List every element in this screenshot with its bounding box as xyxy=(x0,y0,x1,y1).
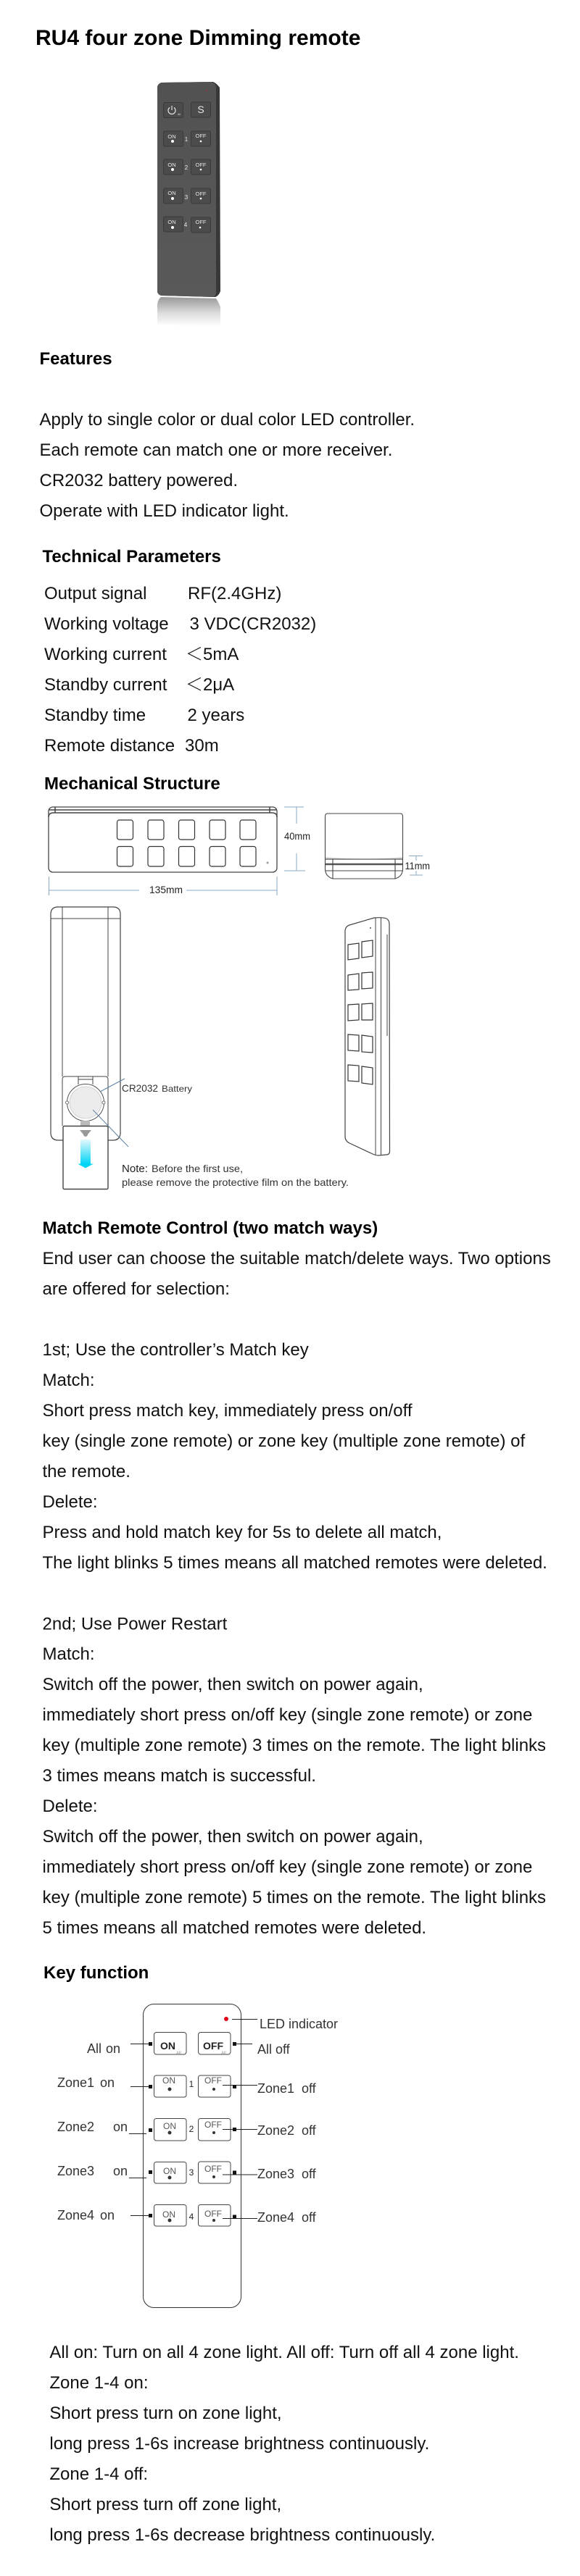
features list: CR2032 battery powered. xyxy=(39,471,238,490)
match method two: Switch off the power, then switch on power again, xyxy=(42,1827,423,1847)
zone 1 keys: ON xyxy=(167,133,176,140)
heading: features: Features xyxy=(39,349,112,369)
zone 4: Zone4 xyxy=(257,2210,294,2225)
remote face xyxy=(157,82,216,297)
technical parameters table xyxy=(44,584,316,756)
zone 2: ON xyxy=(163,2121,176,2131)
mechanical drawing xyxy=(49,807,430,1189)
match intro text: are offered for selection: xyxy=(42,1279,230,1299)
zone 4 keys: 4 xyxy=(184,222,188,228)
zone 2: off xyxy=(302,2123,317,2138)
match method one: Match: xyxy=(42,1371,95,1390)
perspective view xyxy=(345,918,390,1155)
match method one: The light blinks 5 times means all matched remotes were deleted. xyxy=(42,1553,547,1573)
technical parameters table: Standby current xyxy=(44,675,167,695)
all off: All xyxy=(221,2052,226,2056)
title: RU4 four zone Dimming remote xyxy=(36,26,360,50)
zone 1 xyxy=(57,2075,317,2097)
zone 3: ON xyxy=(163,2166,176,2176)
match method two: 5 times means all matched remotes were deleted. xyxy=(42,1918,426,1938)
zone 3 xyxy=(57,2162,317,2183)
technical parameters table: Output signal xyxy=(44,584,146,603)
all off xyxy=(199,2033,291,2057)
led indicator xyxy=(224,2017,338,2031)
S button xyxy=(191,102,210,117)
key function description: Short press turn off zone light, xyxy=(49,2495,281,2514)
all on: All xyxy=(176,2052,181,2056)
product photo: remote xyxy=(157,82,220,326)
zone 2: Zone2 xyxy=(57,2120,94,2134)
technical parameters table: Remote distance xyxy=(44,736,175,756)
key function description: long press 1-6s decrease brightness continuously. xyxy=(49,2525,435,2545)
front view xyxy=(49,807,277,872)
zone 2: OFF xyxy=(204,2120,222,2130)
all on: ON xyxy=(160,2040,175,2052)
zone 4 keys: OFF xyxy=(196,219,207,225)
match method one xyxy=(42,1340,547,1573)
zone 4: on xyxy=(100,2208,115,2222)
zone 1: Zone1 xyxy=(257,2081,294,2096)
match method two xyxy=(42,1614,546,1938)
note xyxy=(122,1163,349,1188)
zone 4 keys: ON xyxy=(167,219,176,225)
zone 1: OFF xyxy=(204,2075,222,2086)
key function description: long press 1-6s increase brightness continuously. xyxy=(49,2434,429,2454)
zone 1: ON xyxy=(162,2075,175,2086)
key function diagram xyxy=(57,2004,338,2308)
zone 4 keys xyxy=(164,217,210,233)
zone 4: Zone4 xyxy=(57,2208,94,2222)
battery leader lines xyxy=(93,1079,128,1147)
dimension: 135mm: 135mm xyxy=(149,885,183,895)
all off: OFF xyxy=(203,2040,223,2052)
zone 4: OFF xyxy=(204,2209,222,2219)
zone 4: off xyxy=(302,2210,317,2225)
remote body side xyxy=(157,82,220,297)
S button: S xyxy=(197,104,204,115)
remote outline xyxy=(144,2004,241,2308)
zone 3: Zone3 xyxy=(57,2164,94,2178)
note: please remove the protective film on the battery. xyxy=(122,1176,349,1188)
zone 2 xyxy=(57,2118,317,2141)
zone 2: Zone2 xyxy=(257,2123,294,2138)
pull tab with arrow xyxy=(63,1126,108,1189)
dimension: 11mm: 11mm xyxy=(405,861,430,871)
technical parameters table: Working voltage xyxy=(44,614,169,634)
zone 1 keys xyxy=(164,131,210,146)
zone 2 keys: OFF xyxy=(196,162,207,168)
match method one: Short press match key, immediately press on/off xyxy=(42,1401,413,1421)
match intro text: End user can choose the suitable match/delete ways. Two options xyxy=(42,1249,551,1268)
technical parameters table: RF(2.4GHz) xyxy=(188,584,281,603)
technical parameters table: ＜5mA xyxy=(186,645,239,664)
match method two: immediately short press on/off key (single zone remote) or zone xyxy=(42,1857,532,1877)
match method one: 1st; Use the controller’s Match key xyxy=(42,1340,309,1360)
led indicator: LED indicator xyxy=(260,2017,338,2031)
note: Note: xyxy=(122,1163,148,1175)
match method two: Switch off the power, then switch on power again, xyxy=(42,1675,423,1694)
zone 1 keys: OFF xyxy=(196,133,207,139)
note: Before the first use, xyxy=(152,1163,243,1174)
zone 1: 1 xyxy=(189,2079,194,2089)
match intro text xyxy=(42,1249,551,1299)
zone 2 keys: 2 xyxy=(185,164,188,171)
zone 3 keys: OFF xyxy=(196,191,207,197)
match method two: key (multiple zone remote) 5 times on the remote. The light blinks xyxy=(42,1888,546,1907)
end view xyxy=(325,814,403,879)
technical parameters table: 2 years xyxy=(187,706,244,725)
technical parameters table: 3 VDC(CR2032) xyxy=(190,614,316,634)
zone 3: Zone3 xyxy=(257,2167,294,2181)
zone 1: Zone1 xyxy=(57,2075,94,2090)
match method two: Match: xyxy=(42,1644,95,1664)
heading: key function: Key function xyxy=(44,1963,149,1983)
dimension: 40mm: 40mm xyxy=(284,831,310,842)
match method one: Delete: xyxy=(42,1492,98,1512)
zone 3: OFF xyxy=(204,2164,222,2174)
zone 4: 4 xyxy=(189,2212,194,2222)
features list: Each remote can match one or more receiver. xyxy=(39,440,392,460)
all off: All xyxy=(257,2042,272,2057)
match method two: Delete: xyxy=(42,1797,98,1816)
features list: Apply to single color or dual color LED controller. xyxy=(39,410,415,430)
dimension: 11mm xyxy=(405,856,430,875)
zone 3 keys: ON xyxy=(167,190,176,196)
battery compartment xyxy=(62,1076,108,1126)
all on: All xyxy=(87,2041,102,2056)
match method two: key (multiple zone remote) 3 times on the remote. The light blinks xyxy=(42,1736,546,1755)
zone 2 keys: ON xyxy=(167,162,176,168)
zone 3 keys xyxy=(164,188,210,204)
zone 3: on xyxy=(113,2164,128,2178)
dimension: 135mm xyxy=(49,877,277,895)
heading: technical parameters: Technical Parameters xyxy=(42,547,221,566)
key function description: Short press turn on zone light, xyxy=(49,2404,282,2423)
zone 4: ON xyxy=(162,2209,175,2220)
key function description xyxy=(49,2343,519,2545)
key function description: Zone 1-4 on: xyxy=(49,2373,148,2393)
key function description: All on: Turn on all 4 zone light. All off: Turn off all 4 zone light. xyxy=(49,2343,519,2362)
power button xyxy=(164,103,183,117)
match method one: the remote. xyxy=(42,1462,130,1481)
heading: mechanical structure: Mechanical Structure xyxy=(44,774,220,794)
zone 2: 2 xyxy=(189,2124,194,2134)
features list xyxy=(39,410,415,521)
all on xyxy=(87,2033,186,2056)
technical parameters table: 30m xyxy=(185,736,219,756)
match method one: key (single zone remote) or zone key (multiple zone remote) of xyxy=(42,1431,525,1451)
all on: on xyxy=(106,2041,120,2056)
led dot xyxy=(206,90,207,91)
zone 2 keys xyxy=(164,159,210,175)
zone 1: on xyxy=(100,2075,115,2090)
zone 1 keys: 1 xyxy=(185,136,188,143)
zone 3 keys: 3 xyxy=(185,194,188,201)
dimension: 40mm xyxy=(284,807,310,871)
zone 3: 3 xyxy=(189,2167,194,2178)
power button: All xyxy=(178,113,181,116)
technical parameters table: Standby time xyxy=(44,706,146,725)
zone 2: on xyxy=(113,2120,128,2134)
all off: off xyxy=(276,2042,291,2057)
features list: Operate with LED indicator light. xyxy=(39,501,289,521)
match method two: 2nd; Use Power Restart xyxy=(42,1614,228,1634)
match method two: 3 times means match is successful. xyxy=(42,1766,316,1786)
back view xyxy=(51,907,120,1140)
remote reflection xyxy=(157,297,220,326)
zone 3: off xyxy=(302,2167,317,2181)
key function description: Zone 1-4 off: xyxy=(49,2464,148,2484)
label: CR2032 battery: CR2032 xyxy=(122,1082,158,1094)
heading: match remote control: Match Remote Control (two match ways) xyxy=(42,1218,378,1238)
zone 1: off xyxy=(302,2081,317,2096)
zone 4 xyxy=(57,2205,317,2226)
technical parameters table: ＜2μA xyxy=(186,675,234,695)
technical parameters table: Working current xyxy=(44,645,167,664)
match method two: immediately short press on/off key (single zone remote) or zone xyxy=(42,1705,532,1725)
label: CR2032 battery: Battery xyxy=(162,1084,192,1094)
match method one: Press and hold match key for 5s to delete all match, xyxy=(42,1523,442,1542)
